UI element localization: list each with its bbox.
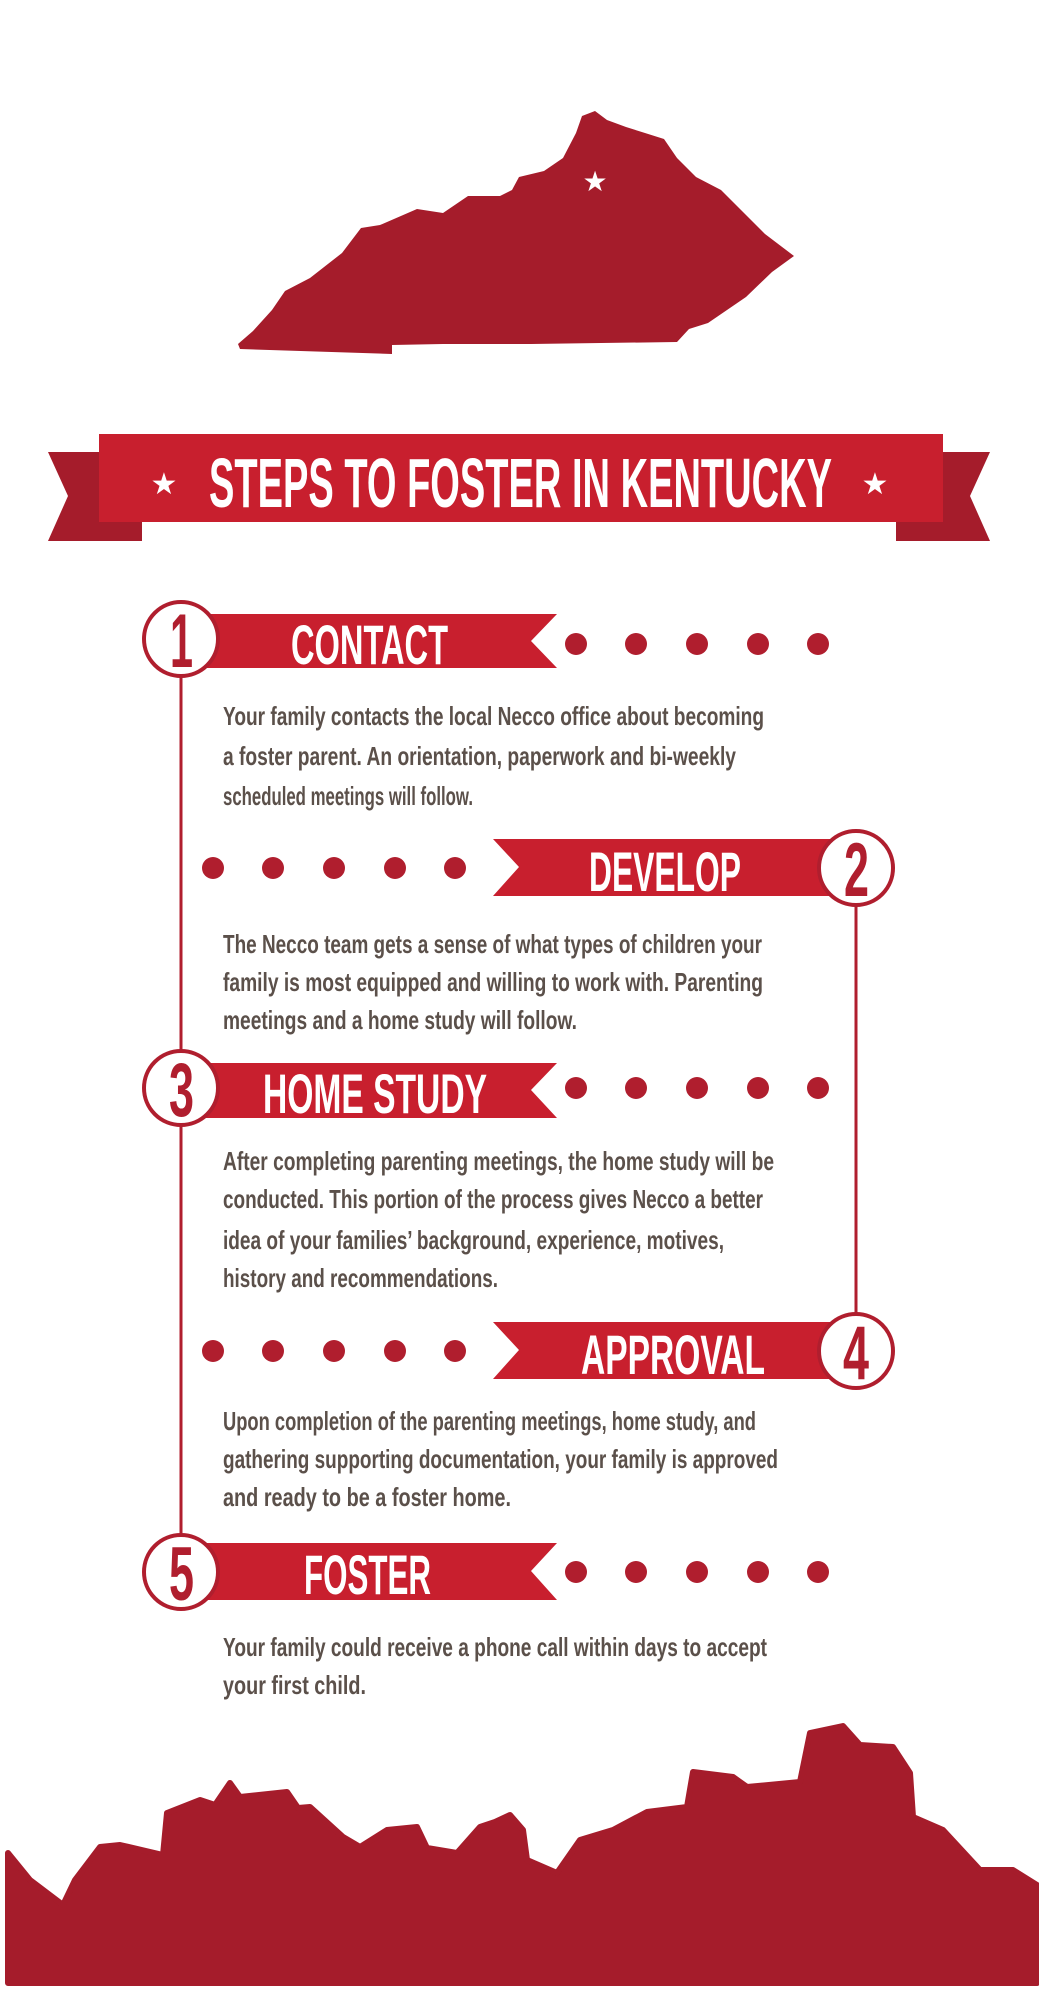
skyline silhouette <box>8 1726 1037 1983</box>
step 1: contact: CONTACT <box>291 613 448 676</box>
step 3: home study: HOME STUDY <box>263 1062 487 1125</box>
step 3: home study: conducted. This portion of the process gives Necco a better <box>223 1184 763 1214</box>
step 2: develop <box>202 828 893 1035</box>
step 4: approval: and ready to be a foster home. <box>223 1482 511 1512</box>
title banner <box>48 434 990 541</box>
step 1: contact: scheduled meetings will follow. <box>223 781 473 811</box>
step 2: develop: family is most equipped and willing to work with. Parenting <box>223 967 763 997</box>
title banner: ★ <box>151 467 177 502</box>
step 5: foster: 5 <box>169 1532 194 1617</box>
title banner: ★ <box>862 467 888 502</box>
step 2: develop: The Necco team gets a sense of what types of children your <box>223 929 762 959</box>
step 3: home study: 3 <box>169 1048 194 1133</box>
step 1: contact: Your family contacts the local Necco office about becoming <box>223 701 764 731</box>
timeline lines <box>181 639 856 1572</box>
step 4: approval: gathering supporting documentation, your family is approved <box>223 1444 778 1474</box>
step 4: approval: APPROVAL <box>581 1323 765 1386</box>
step 3: home study <box>144 1048 829 1293</box>
step 1: contact: 1 <box>170 599 193 684</box>
step 5: foster: your first child. <box>223 1670 366 1700</box>
step 5: foster: FOSTER <box>304 1543 431 1606</box>
step 2: develop: DEVELOP <box>589 840 741 903</box>
step 1: contact <box>144 599 829 811</box>
step 5: foster: Your family could receive a phone call within days to accept <box>223 1632 767 1662</box>
step 1: contact: a foster parent. An orientation, paperwork and bi-weekly <box>223 741 736 771</box>
step 2: develop: meetings and a home study will follow. <box>223 1005 577 1035</box>
map: kentucky <box>238 111 794 354</box>
step 4: approval: Upon completion of the parenting meetings, home study, and <box>223 1406 756 1436</box>
step 3: home study: After completing parenting meetings, the home study will be <box>223 1146 774 1176</box>
step 2: develop: 2 <box>844 828 869 913</box>
step 4: approval <box>202 1311 893 1512</box>
step 4: approval: 4 <box>843 1311 869 1396</box>
icon: capital star: ★ <box>582 165 608 198</box>
step 3: home study: idea of your families’ background, experience, motives, <box>223 1225 724 1255</box>
step 3: home study: history and recommendations. <box>223 1263 498 1293</box>
step 5: foster <box>144 1532 829 1700</box>
